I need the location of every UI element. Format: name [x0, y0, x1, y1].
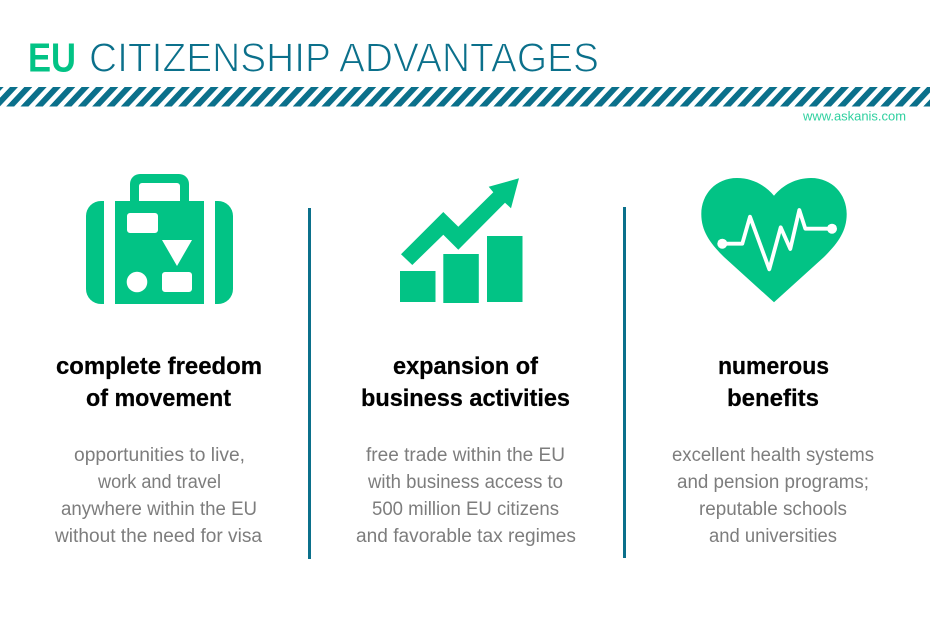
divider right: [623, 207, 626, 558]
panel: benefits: [672, 178, 874, 547]
icon: suitcase: [86, 174, 233, 304]
text: freedom description: without the need for visa: [54, 526, 262, 547]
striped band: [0, 87, 930, 106]
text: freedom description: anywhere within the EU: [61, 499, 257, 520]
heading: benefits: benefits: [727, 385, 819, 412]
icon: heart with pulse: [701, 178, 847, 302]
heading: business: expansion of: [393, 353, 539, 380]
text: benefits description: reputable schools: [699, 499, 847, 520]
heading: benefits: [718, 353, 829, 412]
text: benefits description: [672, 445, 874, 547]
heading: freedom: of movement: [86, 385, 231, 412]
icon: growth chart: [400, 178, 522, 303]
text: business description: with business access to: [367, 472, 563, 493]
text: business description: and favorable tax regimes: [356, 526, 576, 547]
title: EU: [28, 34, 76, 80]
heading: freedom: complete freedom: [56, 353, 262, 380]
website url: www.askanis.com: [802, 108, 906, 124]
heading: freedom: [56, 353, 262, 412]
heading: benefits: numerous: [718, 353, 829, 380]
text: freedom description: opportunities to live,: [74, 445, 245, 466]
heading: business: business activities: [361, 385, 570, 412]
text: business description: free trade within the EU: [366, 445, 565, 466]
text: benefits description: and pension programs;: [677, 472, 869, 493]
heading: business: [361, 353, 570, 412]
text: benefits description: excellent health systems: [672, 445, 874, 466]
panel: freedom of movement: [54, 174, 262, 547]
divider left: [308, 208, 311, 559]
text: benefits description: and universities: [709, 526, 837, 547]
text: freedom description: work and travel: [97, 472, 221, 493]
text: business description: [356, 445, 576, 547]
panel: business activities: [356, 178, 576, 547]
text: business description: 500 million EU citizens: [372, 499, 559, 520]
title: CITIZENSHIP ADVANTAGES: [89, 34, 599, 80]
text: freedom description: [54, 445, 262, 547]
